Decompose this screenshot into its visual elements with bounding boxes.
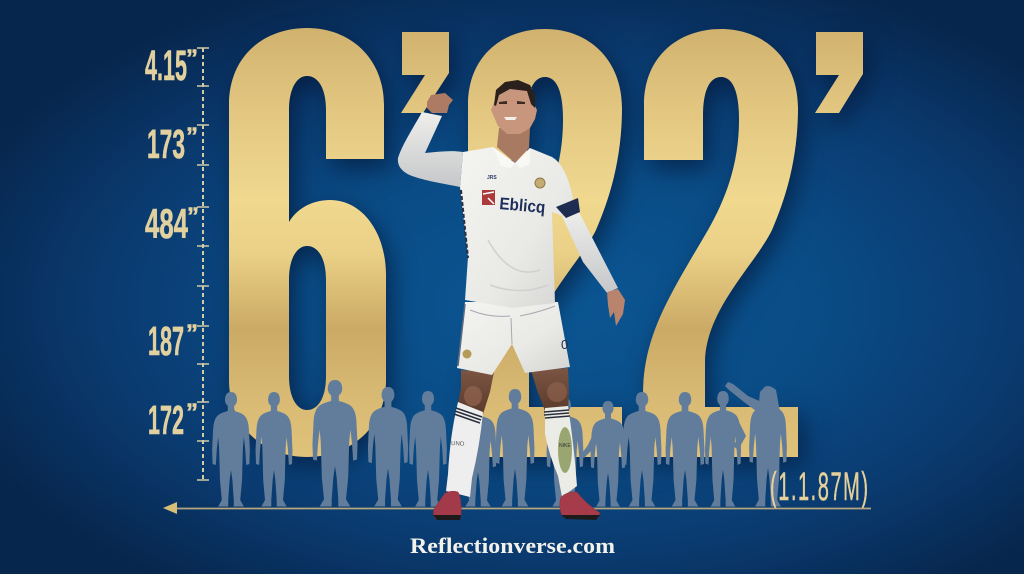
scale label: 173 inches: ” bbox=[186, 123, 198, 150]
left boot bbox=[433, 491, 461, 519]
giant gold height numerals bbox=[229, 28, 863, 457]
height ruler bbox=[197, 48, 209, 480]
row of silhouettes bbox=[212, 380, 787, 507]
sponsor logo mark bbox=[482, 190, 495, 205]
website footer: Reflectionverse.com bbox=[410, 533, 615, 558]
scale label: 4.15 inches bbox=[145, 42, 198, 90]
scale label: 187 inches: 187 bbox=[148, 318, 184, 364]
silhouette 5 bbox=[409, 391, 447, 507]
scale label: 173 inches: 173 bbox=[147, 121, 185, 167]
scale label: 187 inches: ” bbox=[186, 320, 198, 347]
jersey crest bbox=[535, 178, 545, 188]
hair bbox=[494, 80, 535, 108]
left boot sole bbox=[433, 515, 461, 520]
silhouette 11 bbox=[666, 392, 704, 506]
silhouette 12 bbox=[705, 391, 746, 507]
right boot sole bbox=[561, 515, 600, 520]
head bbox=[491, 88, 537, 134]
silhouette 9 bbox=[580, 401, 625, 507]
shorts bbox=[457, 302, 570, 375]
inch prime mark bbox=[815, 32, 863, 113]
silhouette 4 bbox=[368, 387, 408, 506]
right hand bbox=[607, 289, 625, 326]
left sock bbox=[446, 402, 483, 497]
silhouette 13: woman with raised arm bbox=[725, 382, 787, 506]
footballer bbox=[398, 80, 625, 520]
shorts: 0 bbox=[561, 337, 568, 352]
foot prime mark bbox=[401, 32, 449, 113]
jersey torso bbox=[460, 147, 573, 308]
silhouette 7 bbox=[496, 389, 534, 506]
raised fist bbox=[427, 93, 453, 113]
silhouette 6 bbox=[460, 398, 496, 507]
silhouette 3 bbox=[312, 380, 358, 507]
scale label: 484 inches: 484 bbox=[145, 200, 188, 247]
left sock: UNO bbox=[451, 441, 465, 448]
sponsor wordmark: Eblicq bbox=[499, 194, 546, 217]
silhouette 10 bbox=[623, 392, 661, 506]
raised arm sleeve bbox=[398, 112, 463, 187]
lowered arm sleeve bbox=[562, 210, 618, 293]
right sock: NIKE bbox=[559, 443, 571, 449]
right sock bbox=[544, 406, 577, 497]
numeral 6 bbox=[229, 28, 386, 457]
kit maker mark: JRS bbox=[487, 175, 497, 181]
height caption: (1.1.87M) bbox=[770, 463, 868, 509]
middle numeral 2 bbox=[467, 29, 622, 457]
scale label: 172 inches: 172 bbox=[148, 397, 184, 443]
captain armband bbox=[556, 198, 580, 218]
silhouette 1 bbox=[212, 392, 250, 506]
legs bbox=[458, 368, 569, 414]
last numeral 2 bbox=[643, 29, 798, 457]
right boot bbox=[560, 492, 600, 518]
neck bbox=[497, 128, 530, 163]
silhouette 2 bbox=[256, 392, 292, 506]
ground arrow bbox=[163, 502, 871, 514]
scale label: 4.15 inches: 4.15 bbox=[145, 42, 187, 90]
silhouette 8 bbox=[547, 398, 583, 507]
scale label: 4.15 inches: ” bbox=[186, 45, 198, 72]
scale label: 172 inches: ” bbox=[186, 399, 198, 426]
scale label: 484 inches: ” bbox=[187, 203, 199, 230]
